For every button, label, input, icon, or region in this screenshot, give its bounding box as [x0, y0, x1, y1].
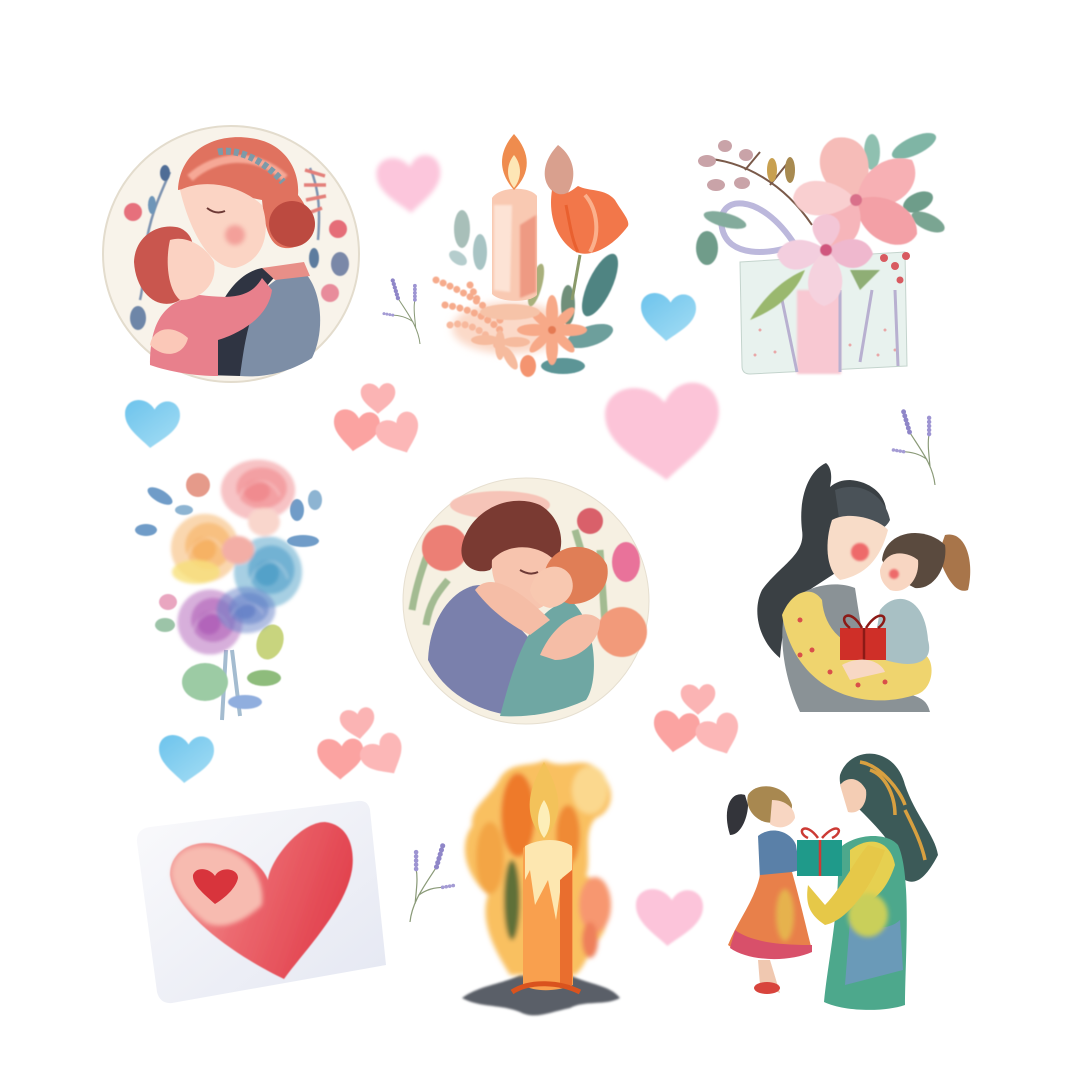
- watercolor splash: [465, 760, 611, 975]
- hearts: coral trio: [330, 383, 427, 461]
- heart: blue lower left: [157, 733, 215, 785]
- ribbon loops: [721, 203, 795, 252]
- twig with buds: [700, 152, 812, 225]
- mother hair: [178, 137, 310, 248]
- girl: [875, 599, 929, 664]
- stems: [222, 650, 240, 720]
- leaves: [696, 128, 948, 320]
- hearts: coral trio lower right: [650, 684, 747, 762]
- small flower: [777, 214, 873, 306]
- tulip: [551, 186, 628, 254]
- illustration: gift box with flowers: [696, 128, 948, 374]
- lavender sprig top: [383, 278, 420, 344]
- base shadow: [462, 975, 620, 1015]
- girl hair: [747, 786, 792, 823]
- child body: [500, 600, 594, 716]
- hearts: coral trio lower left: [308, 702, 415, 792]
- mother hair: [757, 463, 886, 658]
- mother face: [180, 184, 266, 268]
- mother body: [782, 584, 930, 712]
- girl body: [758, 830, 800, 880]
- candle body: [523, 840, 573, 990]
- heart: blue right: [639, 291, 697, 343]
- mother arm: [807, 845, 885, 925]
- mother dress: [824, 836, 907, 1010]
- candle: [492, 189, 537, 301]
- mother hair: [461, 501, 561, 571]
- roses: [171, 460, 302, 655]
- mother face: [492, 547, 559, 612]
- illustration: mother and daughter with red gift: [757, 463, 970, 712]
- arms: [475, 582, 550, 635]
- illustration: mother and little girl exchanging gift: [727, 754, 938, 1010]
- illustration: orange candle: [462, 760, 620, 1015]
- lavender sprig right: [892, 409, 935, 485]
- card with red watercolor heart: [137, 801, 386, 1003]
- mother face: [827, 516, 888, 580]
- heart: pink top: [375, 154, 443, 215]
- sticker: mother hugging child (center): [403, 478, 649, 724]
- sticker: mother hugging child (top left): [103, 126, 359, 382]
- illustration: flower bouquet: [135, 460, 322, 720]
- foliage and blossoms at base: [436, 210, 625, 377]
- child: [150, 278, 272, 376]
- peach wash behind blossoms: [452, 302, 568, 354]
- flame: [502, 134, 527, 190]
- box: [740, 252, 907, 374]
- mother body: [428, 585, 540, 716]
- flame: [530, 762, 558, 840]
- heart: small pink bottom: [634, 888, 704, 948]
- side foliage: [124, 165, 349, 330]
- big flower: [793, 137, 917, 248]
- red gift: [840, 628, 886, 660]
- mother body: [239, 268, 320, 376]
- illustration: candle with flowers: [436, 134, 628, 377]
- green gift: [797, 840, 842, 876]
- child head: [545, 547, 608, 604]
- heart: blue left: [123, 398, 181, 450]
- heart: big pink: [603, 381, 723, 484]
- lavender sprig bottom: [410, 842, 455, 922]
- mother hair: [840, 754, 938, 882]
- mother face: [840, 779, 866, 813]
- bud: [545, 145, 573, 196]
- background flowers and leaves: [412, 491, 647, 657]
- girl face: [770, 800, 795, 827]
- leaves: [135, 473, 322, 709]
